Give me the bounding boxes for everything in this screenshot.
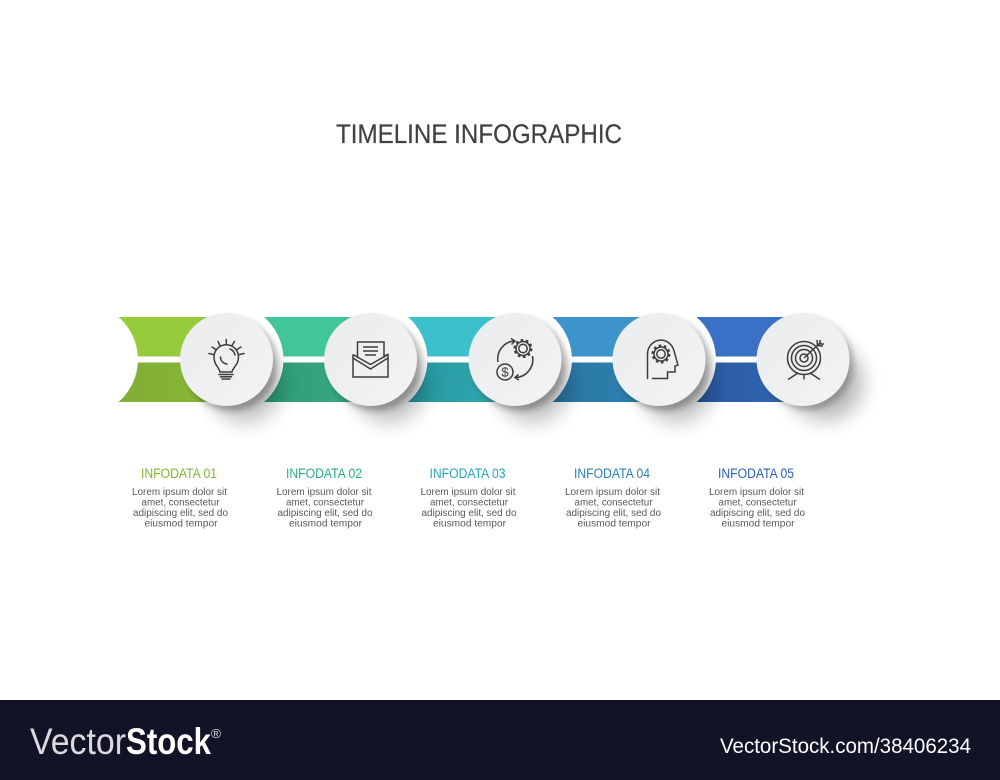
- footer logo: Stock: [126, 721, 211, 762]
- footer logo: Vector: [30, 721, 126, 762]
- band segment 2: [264, 317, 385, 402]
- item 4 heading: INFODATA 04: [574, 466, 650, 481]
- item 5 text: [709, 466, 806, 530]
- item 1 body: Lorem ipsum dolor sit: [132, 487, 227, 498]
- item 3 body: amet, consectetur: [430, 498, 509, 508]
- footer url: VectorStock.com/38406234: [720, 735, 971, 758]
- item 5 body: adipiscing elit, sed do: [710, 508, 806, 519]
- item 1 heading: INFODATA 01: [141, 466, 217, 481]
- title: TIMELINE INFOGRAPHIC: [336, 119, 622, 149]
- item 2 body: [276, 487, 373, 530]
- item 1 text: [132, 466, 229, 530]
- footer bar: [0, 700, 1000, 780]
- item 3 body: eiusmod tempor: [433, 518, 507, 530]
- band segment 3: [408, 317, 530, 402]
- item 5 body: Lorem ipsum dolor sit: [709, 487, 804, 498]
- item 2 body: eiusmod tempor: [289, 518, 363, 530]
- icon: head with gear: [648, 340, 678, 379]
- step 2 circle: [324, 313, 425, 422]
- item 1 body: amet, consectetur: [142, 498, 220, 508]
- item 2 body: adipiscing elit, sed do: [278, 508, 373, 519]
- step 3 circle: [468, 313, 569, 422]
- item 2 body: Lorem ipsum dolor sit: [276, 487, 372, 498]
- item 1 body: eiusmod tempor: [144, 518, 218, 530]
- item 5 body: amet, consectetur: [718, 498, 797, 508]
- item 2 text: [276, 466, 373, 530]
- item 5 heading: INFODATA 05: [718, 466, 794, 481]
- step 4 circle: [612, 313, 713, 422]
- item 2 body: amet, consectetur: [286, 498, 365, 508]
- band segment 5: [696, 317, 800, 402]
- item 3 body: [420, 487, 517, 530]
- item 1 body: [132, 487, 229, 530]
- item 3 body: Lorem ipsum dolor sit: [420, 487, 516, 498]
- item 4 body: eiusmod tempor: [578, 518, 651, 530]
- item 2 heading: INFODATA 02: [286, 466, 362, 481]
- item 4 body: Lorem ipsum dolor sit: [565, 487, 660, 498]
- item 5 body: [709, 487, 806, 530]
- icon: light bulb: [209, 340, 244, 379]
- item 4 body: adipiscing elit, sed do: [566, 508, 662, 519]
- item 3 heading: INFODATA 03: [430, 466, 506, 481]
- timeline band: [118, 317, 800, 402]
- footer logo: [30, 721, 221, 762]
- item 4 body: [565, 487, 662, 530]
- item 5 body: eiusmod tempor: [722, 518, 795, 530]
- step 5 circle: [756, 313, 863, 420]
- item 4 body: amet, consectetur: [574, 498, 653, 508]
- item 3 text: [420, 466, 517, 530]
- footer logo: ®: [211, 726, 221, 741]
- item 4 text: [565, 466, 662, 530]
- band segment 1: [118, 317, 240, 402]
- icon: gear and dollar cycle: $: [501, 365, 509, 380]
- step 1 circle: [180, 313, 281, 422]
- icon: target with arrow: [788, 340, 824, 380]
- icon: envelope: [353, 342, 388, 377]
- band segment 4: [552, 317, 674, 402]
- item 1 body: adipiscing elit, sed do: [133, 508, 229, 519]
- icon: gear and dollar cycle: [497, 338, 533, 380]
- item 3 body: adipiscing elit, sed do: [422, 508, 517, 519]
